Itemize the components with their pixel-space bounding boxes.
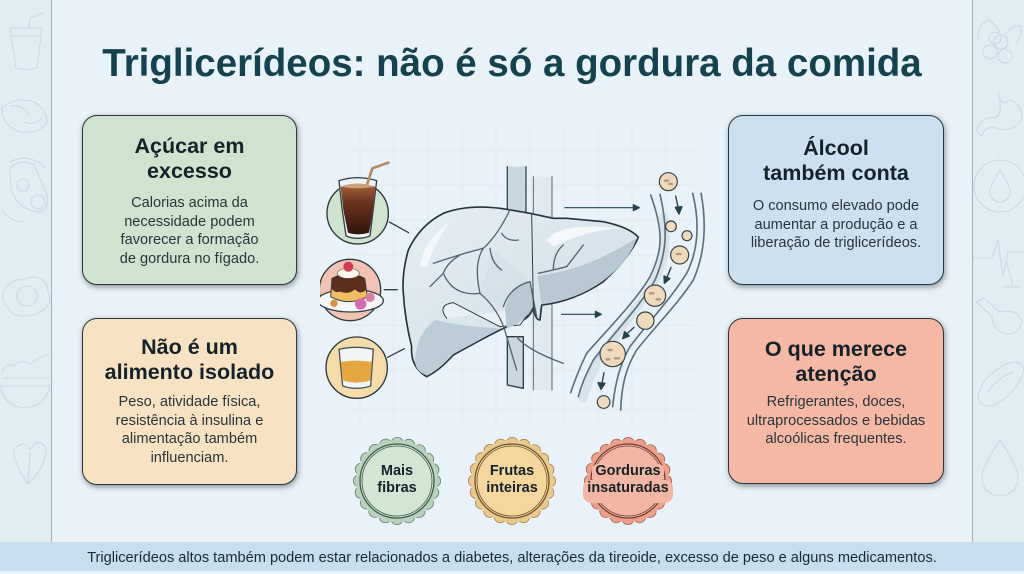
heading: o que merece atenção [765, 337, 907, 386]
text: álcool: O consumo elevado pode [753, 198, 919, 214]
text: fatores: resistência à insulina e [116, 412, 263, 428]
arrows from liver to vessel [562, 205, 639, 317]
text: fatores: influenciam. [151, 450, 228, 466]
text: álcool [751, 198, 921, 251]
icon: stomach [977, 92, 1022, 136]
text: açúcar: favorecer a formação [121, 232, 258, 248]
badge: frutas inteiras: inteiras [486, 480, 538, 496]
heading: álcool também conta [763, 136, 909, 185]
text: álcool: aumentar a produção e a [754, 216, 918, 232]
badge: gorduras insaturadas [583, 437, 673, 525]
icon: drop [982, 440, 1018, 496]
panel: açúcar em excesso [82, 115, 297, 285]
central illustration: liver, vessel and food icons [320, 161, 706, 411]
text: açúcar [120, 195, 259, 266]
liver [403, 207, 638, 377]
connector lines [384, 222, 409, 357]
heading: açúcar em excesso [135, 134, 244, 183]
icon: fried egg [3, 277, 50, 316]
small arrows along vessel [598, 196, 682, 389]
icon: glass with straw [10, 13, 43, 70]
vena cava and aorta vessels [507, 167, 552, 390]
triglyceride particles [597, 173, 692, 408]
icons: left band food outlines [0, 12, 50, 484]
heading: não é um alimento isolado: alimento isolado [105, 360, 274, 384]
icon: water cycle drop [974, 160, 1024, 212]
text: álcool: liberação de triglicerídeos. [751, 235, 921, 251]
footer note [0, 542, 1024, 571]
icon: liver section [978, 362, 1024, 406]
text: atenção: alcoólicas frequentes. [765, 431, 907, 447]
text: fatores: alimentação também [122, 431, 257, 447]
icon: heartbeat and wine glass [973, 240, 1024, 287]
panel: o que merece atenção [728, 318, 944, 484]
heading: o que merece atenção: atenção [795, 362, 877, 386]
text: açúcar: necessidade podem [124, 214, 255, 230]
text: açúcar: de gordura no fígado. [120, 250, 259, 266]
heading: açúcar em excesso: Açúcar em [135, 134, 244, 158]
footer note: Triglicerídeos altos também podem estar relacionados a diabetes, alterações da tireoide, excesso de peso e alguns medicamentos. [87, 550, 937, 566]
icon: leaf [14, 442, 46, 484]
icon: pudding dessert [318, 259, 383, 321]
badge: mais fibras: Mais [381, 463, 413, 479]
panel: não é um alimento isolado [82, 318, 297, 485]
badge: mais fibras [353, 437, 441, 525]
icons: right band food and health outlines [973, 20, 1024, 496]
panel: álcool também conta [728, 115, 944, 285]
icon: whisky glass [326, 337, 387, 398]
badge: frutas inteiras: Frutas [490, 463, 534, 479]
text: fatores: Peso, atividade física, [119, 394, 260, 410]
text: atenção [747, 394, 925, 447]
text: atenção: ultraprocessados e bebidas [747, 412, 925, 428]
text: açúcar: Calorias acima da [131, 195, 248, 211]
badge: mais fibras: fibras [377, 480, 417, 496]
icon: soda glass [327, 163, 388, 244]
badge: frutas inteiras [468, 437, 556, 525]
heading: não é um alimento isolado: Não é um [141, 335, 238, 359]
text: fatores [116, 394, 263, 466]
heading: álcool também conta: Álcool [803, 136, 869, 160]
icon: chicken leg [976, 298, 1022, 334]
icon: steak [2, 100, 47, 132]
heading: não é um alimento isolado [105, 335, 274, 384]
badge: gorduras insaturadas: Gorduras [595, 463, 661, 479]
badge: gorduras insaturadas: insaturadas [587, 480, 669, 496]
icon: meat cut [2, 158, 48, 222]
title: Triglicerídeos: não é só a gordura da comida [102, 42, 922, 85]
heading: açúcar em excesso: excesso [147, 159, 232, 183]
icon: fruits [978, 20, 1021, 63]
blood vessel [571, 193, 704, 410]
heading: álcool também conta: também conta [763, 161, 909, 185]
text: atenção: Refrigerantes, doces, [767, 394, 905, 410]
icon: salad bowl [0, 354, 50, 408]
heading: o que merece atenção: O que merece [765, 337, 907, 361]
